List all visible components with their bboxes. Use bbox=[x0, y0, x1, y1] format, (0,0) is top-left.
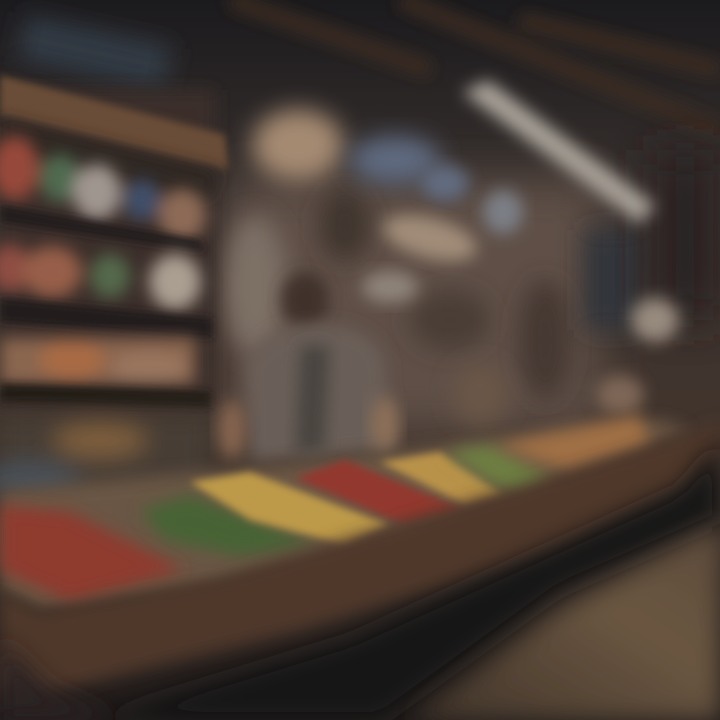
shelf row one goods bbox=[0, 136, 206, 241]
produce counter bbox=[0, 415, 690, 610]
yellow produce bbox=[190, 472, 390, 545]
ceiling light bbox=[462, 80, 655, 224]
vendor figure bbox=[218, 272, 399, 462]
red produce middle bbox=[295, 460, 465, 525]
floor bbox=[410, 525, 720, 720]
shelf row two goods bbox=[0, 244, 201, 310]
hanging items bbox=[223, 109, 679, 425]
shelf board three bbox=[0, 298, 212, 338]
top shelf board bbox=[0, 75, 228, 170]
counter front bbox=[0, 420, 720, 695]
back wall and ceiling bbox=[16, 0, 720, 430]
lower left corner shadow bbox=[0, 640, 120, 720]
lower shelf goods bbox=[0, 415, 210, 496]
counter base produce backdrop bbox=[0, 420, 690, 610]
red produce front bbox=[0, 505, 185, 602]
yellow produce middle bbox=[380, 452, 505, 505]
orange produce right bbox=[495, 415, 650, 472]
shelf row three goods bbox=[0, 338, 195, 384]
shelf board two bbox=[0, 205, 205, 252]
green produce right bbox=[445, 445, 555, 498]
shelf board four bbox=[0, 384, 210, 408]
foreground shadow bbox=[90, 440, 720, 720]
green produce bbox=[140, 495, 320, 556]
left shelves bbox=[0, 75, 228, 496]
